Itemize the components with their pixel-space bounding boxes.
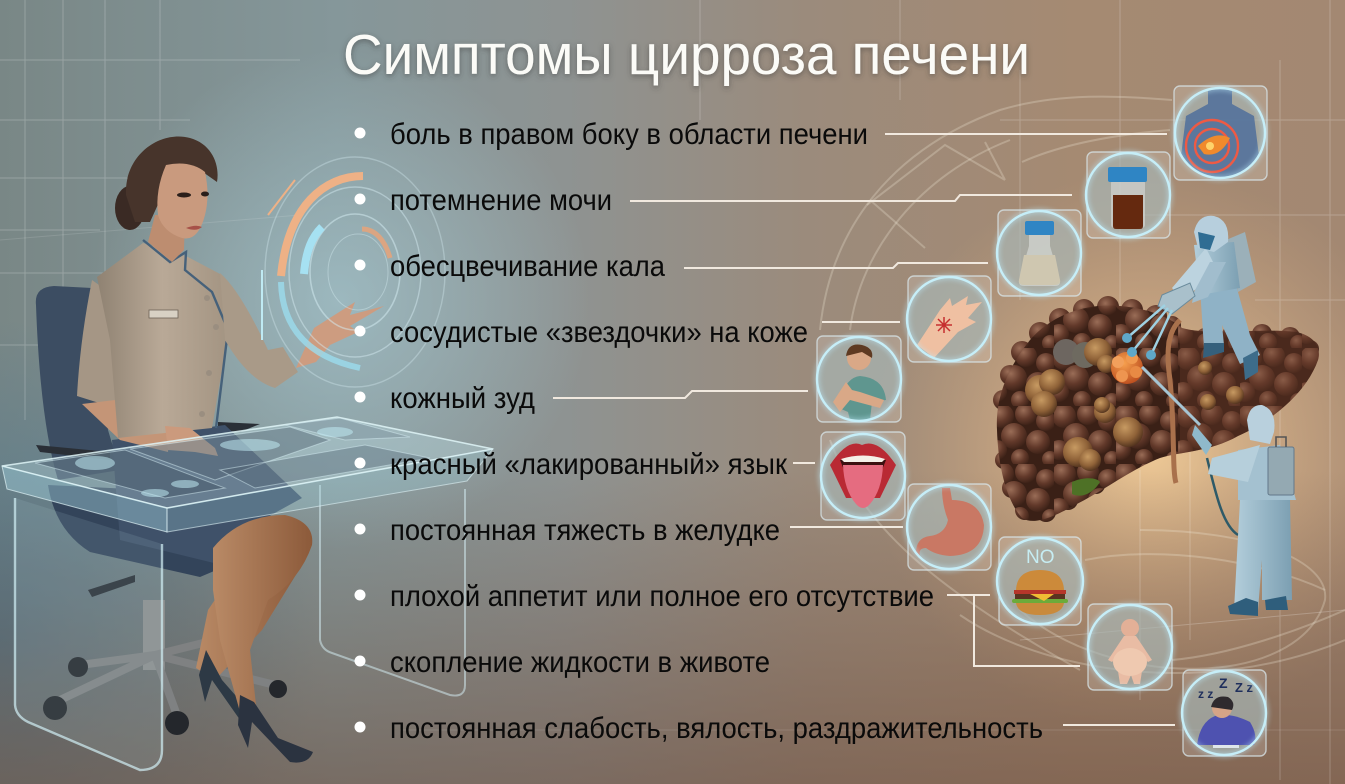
symptom 1: боль в правом боку в области печени — [390, 118, 868, 151]
symptom 5: кожный зуд — [390, 382, 535, 415]
symptom 9: скопление жидкости в животе — [390, 646, 770, 679]
symptom 4: сосудистые «звездочки» на коже — [390, 316, 808, 349]
symptom 3: обесцвечивание кала — [390, 250, 665, 283]
back shoe — [199, 650, 250, 727]
legs — [1200, 285, 1260, 364]
office chair — [36, 286, 287, 735]
title: Симптомы цирроза печени — [343, 23, 1030, 87]
glass desk — [2, 417, 493, 770]
face — [157, 164, 208, 239]
probe — [1142, 367, 1200, 425]
icon: stool sample jar — [997, 210, 1081, 296]
body and arm — [1238, 445, 1296, 500]
left hand — [165, 426, 218, 456]
jacket torso — [97, 243, 228, 438]
jacket collar and placket — [143, 240, 228, 428]
icon: stomach — [907, 484, 991, 570]
woman — [77, 137, 384, 763]
icon: burger with NO: NO — [1026, 547, 1054, 568]
icon: torso with liver pain — [1174, 86, 1267, 180]
icon: hand with spider veins — [907, 276, 991, 362]
symptom 8: плохой аппетит или полное его отсутствие — [390, 580, 934, 613]
desk screens — [35, 418, 430, 498]
right hand — [296, 302, 384, 368]
right arm — [220, 273, 298, 388]
icon: red lips and tongue — [821, 432, 905, 520]
icon: tired person with zzz — [1182, 670, 1266, 756]
buttons — [199, 295, 219, 417]
hair — [126, 137, 218, 222]
icon: boy scratching arm — [817, 336, 901, 422]
connector lines — [553, 134, 1175, 725]
liver edge bumps — [993, 296, 1319, 522]
bullets — [354, 128, 366, 732]
small orange arc — [362, 229, 390, 258]
hair bun — [115, 186, 145, 230]
blue arcs — [304, 227, 322, 274]
symptom 7: постоянная тяжесть в желудке — [390, 514, 780, 547]
tubes — [1127, 305, 1172, 355]
front shoe — [238, 695, 313, 763]
icon: swollen belly figure — [1088, 604, 1172, 690]
icon: urine container — [1086, 152, 1170, 238]
icon: burger with NO — [997, 537, 1083, 625]
holographic arcs behind liver — [820, 97, 1345, 673]
back leg and shoe — [196, 530, 305, 680]
symptom 6: красный «лакированный» язык — [390, 448, 788, 481]
hose — [1207, 458, 1238, 535]
symptom 10: постоянная слабость, вялость, раздражительность — [390, 712, 1043, 745]
backpack — [1268, 447, 1294, 495]
hood — [1194, 216, 1228, 252]
icon: tired person with zzz: z z — [1198, 687, 1213, 701]
orange arc — [281, 176, 363, 276]
left forearm — [82, 400, 170, 452]
left sleeve — [77, 280, 120, 408]
torso and arms — [1194, 242, 1240, 295]
backpack — [1226, 232, 1256, 292]
worker on liver — [1122, 216, 1260, 380]
icon: tired person with zzz: Z z — [1235, 680, 1254, 695]
tumor — [1111, 352, 1143, 384]
legs — [1234, 500, 1292, 610]
worker standing — [1142, 367, 1296, 616]
neck — [148, 215, 185, 262]
skirt — [112, 425, 302, 565]
symptom 2: потемнение мочи — [390, 184, 612, 217]
gallbladder — [1072, 478, 1100, 496]
holographic gauge — [262, 157, 445, 387]
hood — [1247, 405, 1274, 444]
name badge — [149, 310, 178, 318]
icon: tired person with zzz: Z — [1219, 675, 1228, 691]
symptom list — [354, 118, 1043, 745]
front thigh and leg — [213, 515, 312, 712]
liver — [993, 296, 1345, 522]
sprayer device — [1158, 283, 1195, 314]
falciform ligament — [1168, 320, 1180, 483]
